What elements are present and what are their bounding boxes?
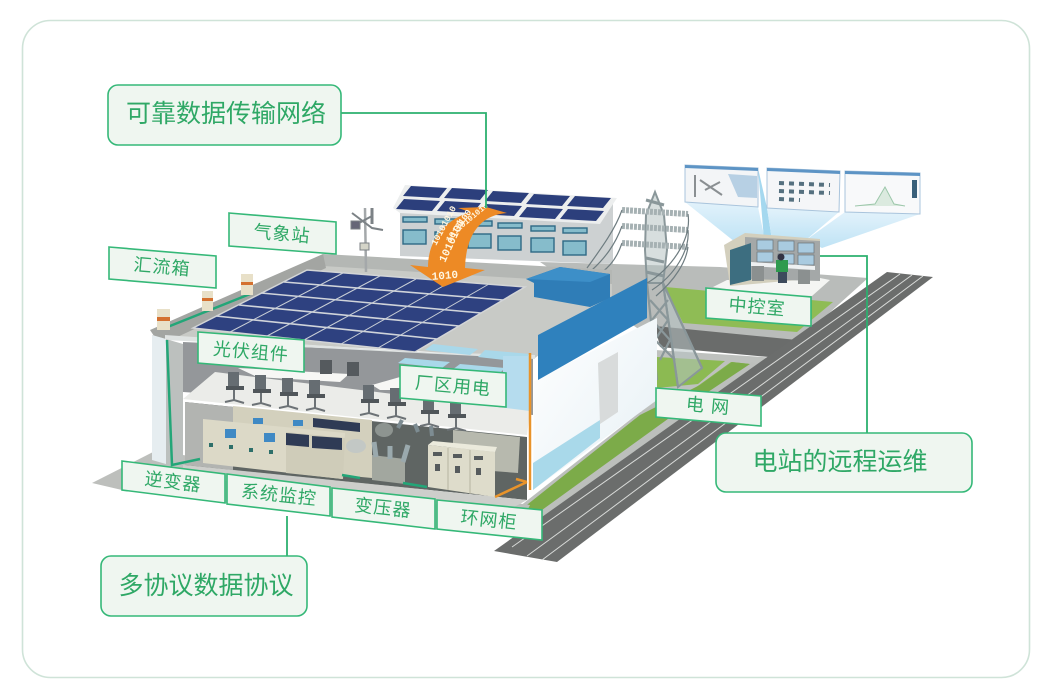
road <box>494 272 933 562</box>
label: 光伏组件: 光伏组件 <box>212 339 290 365</box>
weather station <box>351 208 383 272</box>
upper floor slab <box>183 372 530 435</box>
label: 光伏组件 <box>198 332 304 372</box>
callout: 电站的远程运维 <box>716 433 972 492</box>
label: 电网: 电 网 <box>685 394 731 418</box>
label: 电网 <box>656 388 761 426</box>
binary text: 1010101 <box>438 217 468 265</box>
building cross-section <box>152 335 535 512</box>
orange data arrow <box>410 202 507 287</box>
label: 系统监控 <box>227 474 330 516</box>
rooftop <box>150 254 612 358</box>
roof edge <box>165 335 535 359</box>
label: 环网柜 <box>437 500 542 540</box>
label: 气象站 <box>229 213 336 254</box>
binary text: 10101010 <box>455 202 491 233</box>
rear building <box>393 185 617 264</box>
lawn strip <box>523 362 750 510</box>
binary text: 10101010 <box>430 205 459 247</box>
monitoring screenshots <box>685 165 920 214</box>
control room beams <box>685 168 920 248</box>
combiner boxes <box>157 274 253 330</box>
curb <box>515 362 760 522</box>
rear building windows <box>403 217 587 255</box>
binary text <box>430 202 491 284</box>
road markings <box>512 274 923 560</box>
upper room back wall <box>183 342 533 415</box>
tower mast <box>645 192 702 387</box>
green communication cable <box>165 294 427 487</box>
skylights <box>398 344 530 375</box>
label: 汇流箱 <box>109 247 216 288</box>
callout: 电站的远程运维: 电站的远程运维 <box>752 448 928 476</box>
control room <box>713 233 830 296</box>
label: 厂区用电: 厂区用电 <box>414 373 492 399</box>
server racks <box>730 243 751 285</box>
callout: 多协议数据协议: 多协议数据协议 <box>118 572 294 600</box>
label: 逆变器 <box>122 461 225 503</box>
meeting tables and chairs <box>225 360 466 431</box>
transformer <box>346 420 432 484</box>
rear parapet <box>323 254 612 284</box>
label: 中控室: 中控室 <box>728 295 786 319</box>
ring main unit cabinets <box>428 430 520 497</box>
left parapet <box>150 254 326 345</box>
callout: 可靠数据传输网络: 可靠数据传输网络 <box>126 100 326 128</box>
rear building solar panels <box>396 186 611 221</box>
label: 气象站: 气象站 <box>253 222 311 246</box>
callout: 可靠数据传输网络 <box>108 85 341 145</box>
binary text: 1010 <box>431 270 459 284</box>
wall displays <box>757 240 814 265</box>
label: 变压器: 变压器 <box>354 495 412 521</box>
lower floor <box>180 465 527 512</box>
label: 中控室 <box>706 288 811 326</box>
label: 汇流箱: 汇流箱 <box>133 255 191 279</box>
label: 变压器 <box>332 488 435 529</box>
lower room wall <box>185 402 527 500</box>
lawn: lower left <box>657 357 725 388</box>
operator <box>776 254 788 283</box>
ground slab <box>92 451 530 530</box>
paving: lower <box>640 350 778 420</box>
cabinet displays <box>225 418 303 442</box>
roof solar array <box>193 270 525 352</box>
glazing band <box>533 420 600 490</box>
inverter cabinets <box>203 418 360 479</box>
door <box>598 352 618 424</box>
blue roof box <box>526 267 610 307</box>
callout: 多协议数据协议 <box>101 556 307 616</box>
label: 厂区用电 <box>400 365 506 407</box>
side road <box>655 326 812 358</box>
power transmission tower <box>587 192 702 387</box>
console desk <box>751 262 815 270</box>
side white wall <box>533 278 657 490</box>
lawn: control room <box>665 287 833 332</box>
blue glazing <box>503 356 531 416</box>
label: 环网柜: 环网柜 <box>460 507 518 533</box>
orange power conduit <box>495 353 530 497</box>
blue wall <box>538 278 647 380</box>
binary text: 1010100 <box>444 208 474 245</box>
connector lines <box>287 113 867 556</box>
label: 逆变器: 逆变器 <box>143 469 203 495</box>
left wall <box>152 335 183 472</box>
label: 系统监控: 系统监控 <box>240 481 318 509</box>
lawn: lower right <box>695 362 751 390</box>
road and site ground <box>92 262 933 562</box>
